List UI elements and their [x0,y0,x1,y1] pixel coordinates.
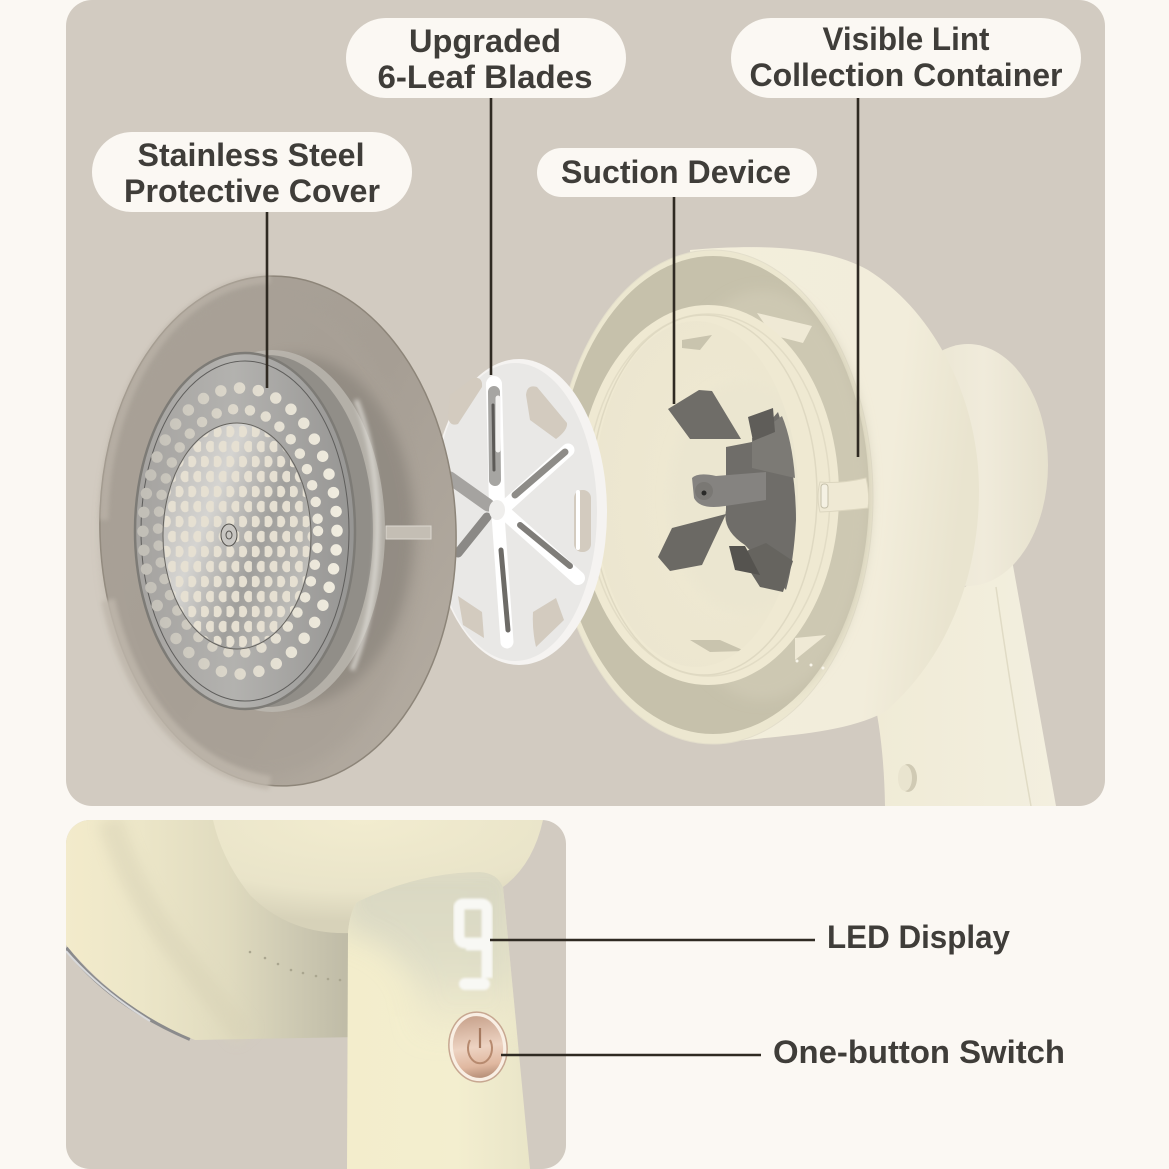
opening interior ring [557,256,869,734]
hub [725,412,796,590]
LED digit [459,904,487,984]
leaf bottom-left [658,514,726,571]
back dome [942,344,1048,586]
head bulb [690,247,979,743]
blades [450,384,578,642]
callout: suction device [537,148,817,197]
inner latches [757,313,812,343]
power button [448,1011,508,1083]
callout: upgraded 6-leaf blades [346,18,626,98]
panel: exploded view background [66,0,1105,806]
callout: upgraded 6-leaf blades: 6-Leaf Blades [378,59,592,95]
callout: stainless steel protective cover [92,132,412,212]
metal edge [66,948,190,1039]
mesh outer disc [135,353,355,709]
handle [872,560,1056,806]
label: one-button switch: One-button Switch [773,1034,1065,1070]
callout: stainless steel protective cover: Stainless Steel [138,137,364,173]
part: 6-leaf blade disc [431,359,607,665]
outer ring holes [143,388,337,674]
part: stainless steel protective cover [91,270,465,792]
light outer rim [104,279,270,520]
leaf top-left [668,390,741,439]
outer flange [553,250,873,744]
center mark [221,524,237,546]
cover flange [91,270,465,792]
strap tab [818,478,869,512]
shadow around cup [178,355,414,705]
callout: upgraded 6-leaf blades: Upgraded [409,23,561,59]
shaft [692,472,766,507]
callout: visible lint collection container [731,18,1081,98]
dome [213,820,543,933]
callout: suction device: Suction Device [561,154,791,190]
tab [386,526,431,539]
callout: visible lint collection container: Visible Lint [822,21,990,57]
head body [66,820,360,1040]
product: device body with open head [553,247,1056,806]
vent dots [249,951,341,981]
leaf bottom-right [739,543,793,592]
leaf top-right [748,408,775,441]
fan: suction device [658,390,796,592]
vent dots [796,660,824,670]
label: LED display: LED Display [827,919,1010,955]
handle hole [905,764,917,792]
callout: visible lint collection container: Collection Container [750,57,1062,93]
panel: close-up of handle [66,820,566,1169]
leader lines for upper callouts [267,98,858,457]
inner mesh disc [163,423,311,649]
callout: stainless steel protective cover: Protective Cover [124,173,380,209]
barrel rim [577,305,839,685]
barrel inside [594,321,798,667]
clear lip [159,350,385,712]
handle [347,872,530,1169]
inner ring holes [158,409,318,653]
leader line: one-button switch [501,1054,761,1056]
leader line: LED display [490,939,815,941]
